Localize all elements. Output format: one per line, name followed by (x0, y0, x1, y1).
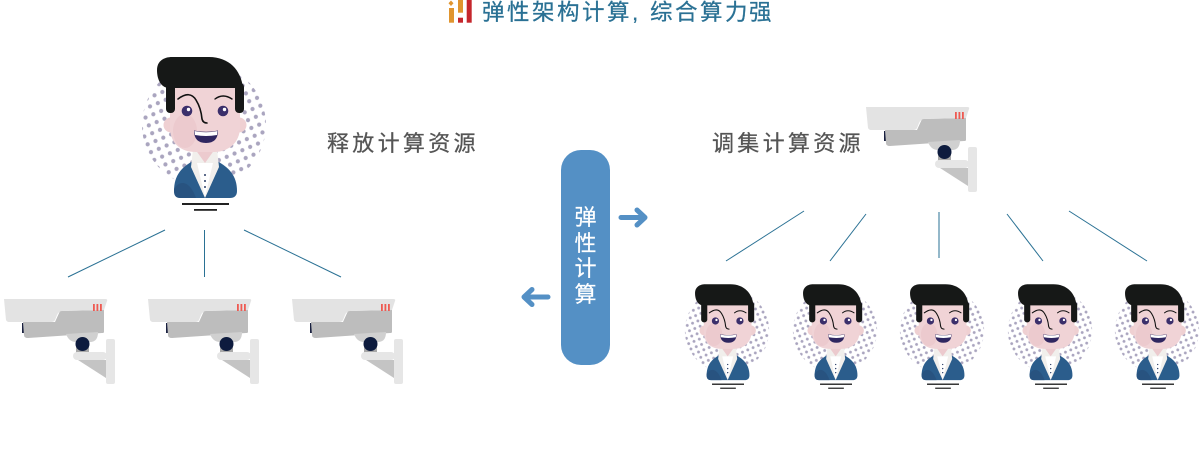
icon: manager person (142, 57, 266, 211)
panel: elastic computing pill: 计 (574, 256, 597, 281)
arrow: right (621, 210, 645, 225)
icon: person 3 (900, 284, 984, 389)
panel: gather computing resources (685, 107, 1199, 389)
label: gather resources: 调集计算资源 (712, 131, 864, 156)
label: release resources: 释放计算资源 (327, 131, 479, 156)
connector lines to three cameras (68, 230, 341, 277)
panel: elastic computing pill: 性 (574, 231, 597, 256)
icon: person 1 (685, 284, 769, 389)
arrow: left (524, 290, 548, 304)
icon: central camera (866, 107, 977, 192)
connector lines to five people (726, 211, 1147, 261)
panel: release computing resources (4, 57, 479, 384)
panel: elastic computing pill: 弹 (574, 205, 597, 230)
icon: camera 1 (4, 299, 115, 384)
icon: title logo (448, 0, 472, 23)
title text: 弹性架构计算,综合算力强 (482, 0, 772, 25)
icon: person 4 (1008, 284, 1092, 389)
title (448, 0, 772, 25)
panel: elastic computing pill: 算 (574, 282, 597, 307)
icon: person 5 (1115, 284, 1199, 389)
icon: person 2 (793, 284, 877, 389)
icon: camera 2 (148, 299, 259, 384)
panel: elastic computing pill (561, 150, 610, 365)
icon: camera 3 (292, 299, 403, 384)
